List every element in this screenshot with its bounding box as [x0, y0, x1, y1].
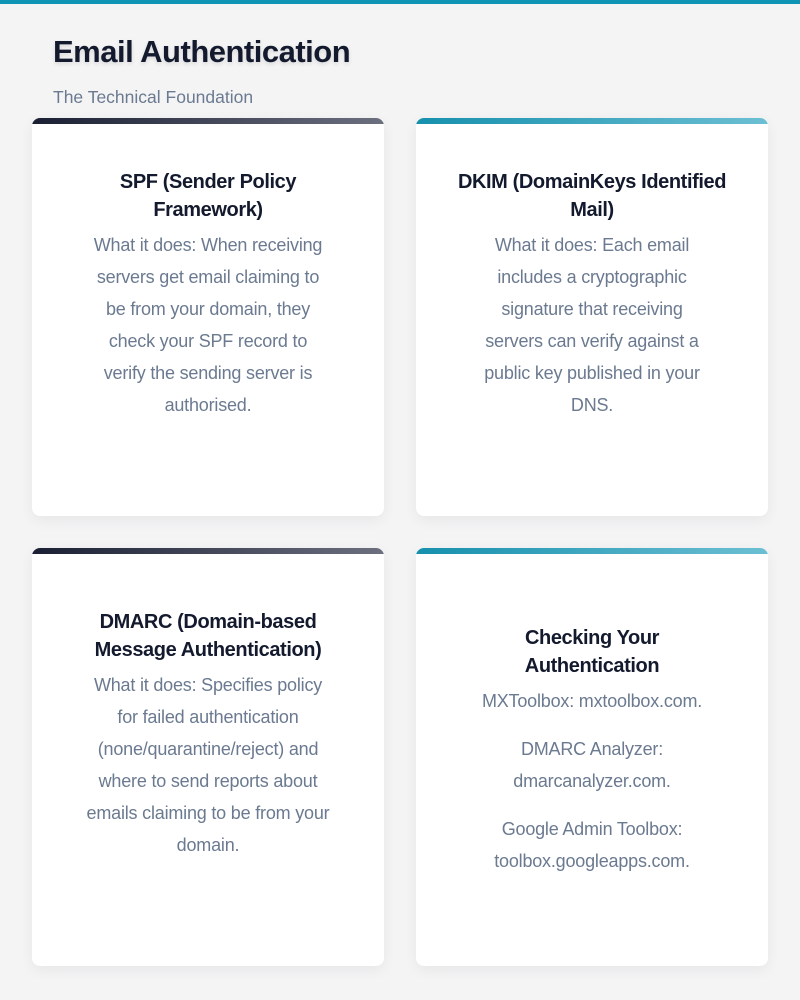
text: DMARC description — [87, 675, 330, 855]
text: DKIM description: includes a cryptographic — [497, 267, 687, 287]
text: DMARC description: emails claiming to be from your — [87, 803, 329, 823]
text: SPF description: servers get email claiming to — [97, 267, 319, 287]
panel: SPF — [32, 118, 384, 516]
text: SPF description — [94, 235, 322, 415]
text: DMARC description: domain. — [177, 835, 239, 855]
heading: DKIM — [458, 171, 726, 221]
text: tools list: Google Admin Toolbox: — [502, 819, 682, 839]
text: DMARC description: where to send reports about — [99, 771, 317, 791]
heading: SPF — [120, 171, 296, 221]
text: DKIM description: servers can verify against a — [485, 331, 699, 351]
text: SPF description: check your SPF record to — [109, 331, 307, 351]
heading: DKIM: DKIM (DomainKeys Identified — [458, 171, 726, 193]
heading: checking: Authentication — [525, 655, 659, 677]
panel: DKIM — [416, 118, 768, 516]
heading: checking — [525, 627, 660, 677]
text: SPF description: be from your domain, they — [106, 299, 310, 319]
heading: SPF: Framework) — [153, 199, 263, 221]
heading: DKIM: Mail) — [570, 199, 614, 221]
text: SPF description: authorised. — [165, 395, 251, 415]
text: DKIM description: What it does: Each email — [495, 235, 689, 255]
text: DMARC description: What it does: Specifies policy — [94, 675, 322, 695]
text: DKIM description: public key published in your — [484, 363, 700, 383]
title: Email Authentication — [53, 34, 350, 69]
text: tools list: DMARC Analyzer: — [521, 739, 663, 759]
heading: DMARC — [95, 611, 321, 661]
text: DKIM description — [484, 235, 700, 415]
subtitle: The Technical Foundation — [53, 87, 253, 107]
text: DMARC description: (none/quarantine/reject) and — [98, 739, 318, 759]
panel: DMARC — [32, 548, 384, 966]
heading: DMARC: Message Authentication) — [95, 639, 321, 661]
text: DKIM description: DNS. — [571, 395, 613, 415]
text: tools list: MXToolbox: mxtoolbox.com. — [482, 691, 702, 711]
heading: SPF: SPF (Sender Policy — [120, 171, 296, 193]
heading: DMARC: DMARC (Domain-based — [100, 611, 316, 633]
text: DKIM description: signature that receiving — [501, 299, 683, 319]
text: tools list: dmarcanalyzer.com. — [513, 771, 671, 791]
text: SPF description: What it does: When receiving — [94, 235, 322, 255]
text: tools list — [482, 691, 702, 871]
text: DMARC description: for failed authentication — [117, 707, 299, 727]
text: tools list: toolbox.googleapps.com. — [494, 851, 690, 871]
text: SPF description: verify the sending server is — [104, 363, 312, 383]
heading: checking: Checking Your — [525, 627, 659, 649]
panel: checking — [416, 548, 768, 966]
